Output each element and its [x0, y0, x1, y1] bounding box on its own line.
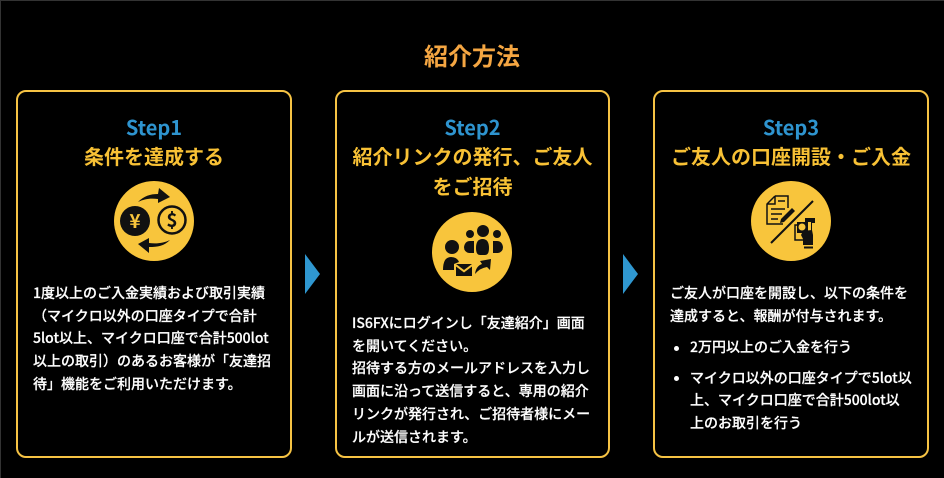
panel: step 1: [16, 90, 292, 458]
arrow: step 1 to 2: [305, 254, 320, 294]
bullet 2: [674, 368, 912, 433]
step 2 description: 画面に沿って送信すると、専用の紹介: [352, 381, 589, 401]
step 3 label: Step3: [763, 112, 819, 141]
title: 紹介方法: [424, 37, 520, 72]
panel: step 2: [335, 90, 610, 458]
step 2 description: 招待する方のメールアドレスを入力し: [352, 358, 590, 378]
step 1 description: 以上の取引）のあるお客様が「友達招: [33, 351, 271, 371]
step 2 description: [352, 313, 590, 447]
icon: account opening and deposit: [751, 181, 831, 261]
bullet 2: マイクロ以外の口座タイプで5lot以: [690, 368, 912, 388]
bullet 1: 2万円以上のご入金を行う: [690, 337, 852, 357]
bullet list: [674, 337, 912, 433]
step 2 heading: [352, 141, 592, 200]
icon: invite friends: [432, 212, 512, 292]
step 3 heading: ご友人の口座開設・ご入金: [671, 141, 911, 170]
step 2 heading: 紹介リンクの発行、ご友人: [352, 141, 592, 170]
step 1 description: 1度以上のご入金実績および取引実績: [33, 283, 265, 303]
step 1 heading: 条件を達成する: [84, 141, 224, 170]
panel: step 3: [653, 90, 929, 458]
step 2 description: IS6FXにログインし「友達紹介」画面: [352, 313, 585, 333]
step 2 label: Step2: [444, 112, 501, 141]
arrow: step 2 to 3: [623, 254, 638, 294]
step 1 description: （マイクロ以外の口座タイプで合計: [33, 306, 257, 326]
step 2 description: リンクが発行され、ご招待者様にメー: [352, 404, 590, 424]
icon: currency exchange: ¥: [129, 207, 141, 234]
icon: currency exchange: [114, 181, 194, 261]
icon: currency exchange: $: [166, 206, 178, 233]
step 1 description: [33, 283, 271, 394]
step 2 heading: をご招待: [432, 171, 512, 200]
step 1 description: 待」機能をご利用いただけます。: [33, 374, 242, 394]
bullet 2: 上、マイクロ口座で合計500lot以: [690, 390, 900, 410]
step 3 description: [670, 283, 908, 326]
step 3 description: 達成すると、報酬が付与されます。: [670, 306, 892, 326]
step 1 label: Step1: [126, 112, 182, 141]
step 2 description: ルが送信されます。: [352, 427, 477, 447]
step 1 description: 5lot以上、マイクロ口座で合計500lot: [33, 328, 269, 348]
step 3 description: ご友人が口座を開設し、以下の条件を: [670, 283, 908, 303]
step 2 description: を開いてください。: [352, 336, 477, 356]
bullet 2: 上のお取引を行う: [690, 413, 802, 433]
